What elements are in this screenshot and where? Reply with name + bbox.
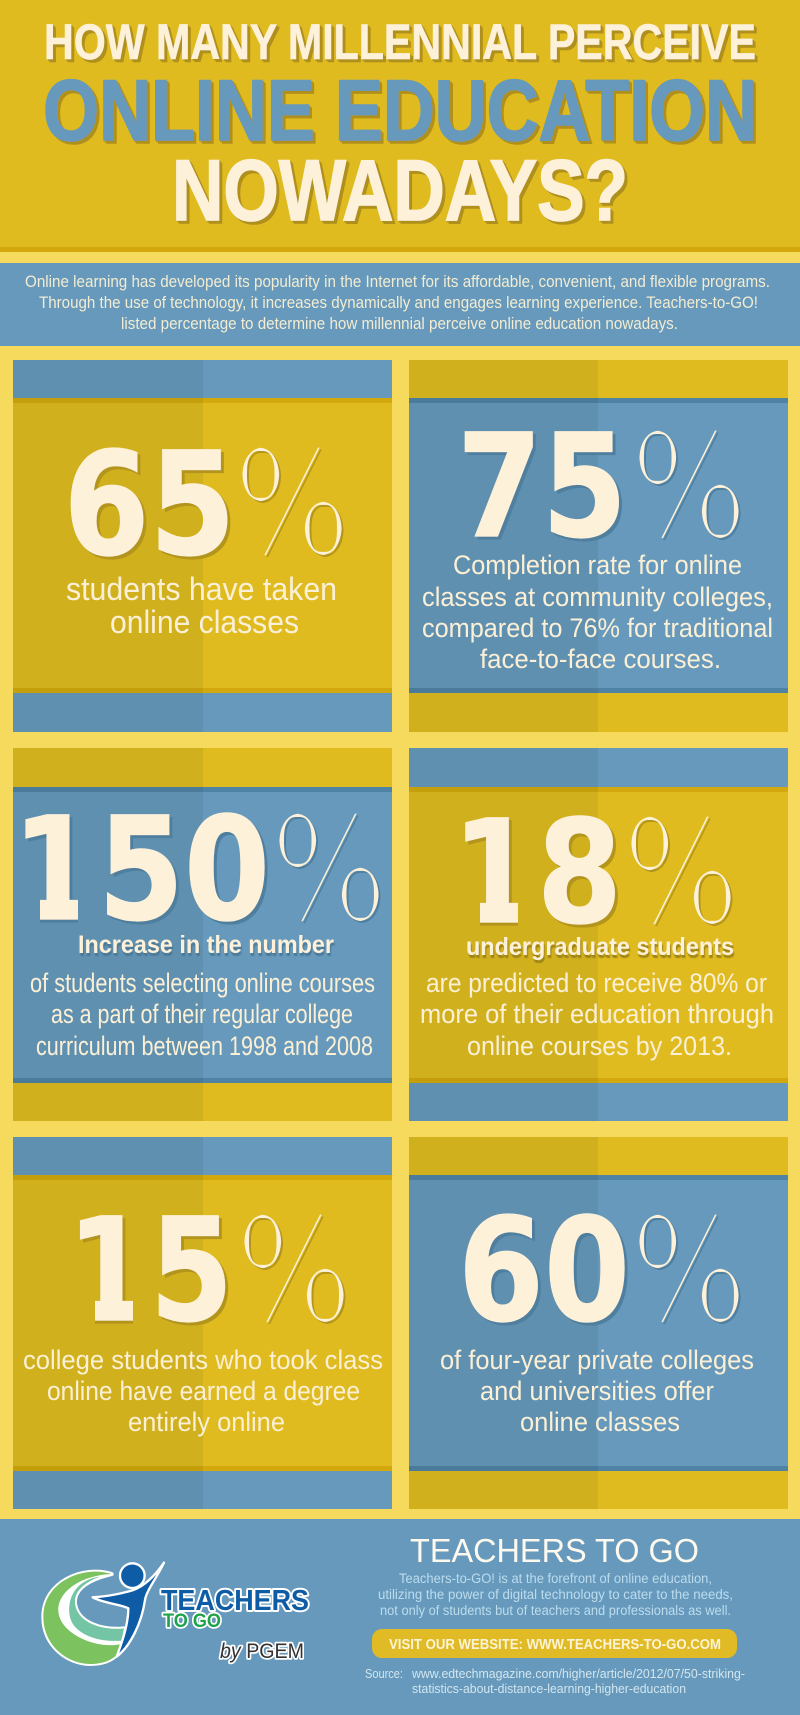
caption: [66, 571, 337, 640]
stat: 65%: [64, 418, 351, 592]
caption: Completion rate for online: [453, 550, 742, 580]
source: Source:: [365, 1667, 403, 1681]
panel: 65 percent: [13, 360, 392, 732]
caption: students have taken: [66, 571, 337, 607]
logo: [43, 1563, 309, 1664]
caption: [440, 1345, 754, 1437]
panel: 60 percent: [409, 1137, 788, 1509]
panel: 18 percent: [409, 748, 788, 1121]
stat: 150%: %: [270, 784, 388, 958]
stat: 18%: [465, 815, 732, 928]
source: www.edtechmagazine.com/higher/article/2012/07/50-striking-: [411, 1667, 745, 1681]
title: [43, 14, 757, 239]
footer description: not only of students but of teachers and professionals as well.: [380, 1603, 731, 1618]
stat: 18%: %: [622, 787, 740, 961]
website button: VISIT OUR WEBSITE: WWW.TEACHERS-TO-GO.COM: [389, 1637, 721, 1653]
logo icon: swoosh and figure: [43, 1563, 164, 1664]
stat: 60%: [458, 1185, 748, 1359]
caption: online courses by 2013.: [467, 1031, 732, 1061]
footer description: Teachers-to-GO! is at the forefront of online education,: [399, 1571, 712, 1586]
caption: online classes: [520, 1407, 680, 1437]
caption: online have earned a degree: [47, 1376, 360, 1406]
caption: online classes: [110, 604, 299, 640]
caption: compared to 76% for traditional: [422, 613, 773, 643]
caption: [23, 1345, 383, 1437]
footer description: [378, 1571, 733, 1618]
footer heading: TEACHERS TO GO: [410, 1532, 699, 1569]
header banner: [0, 0, 800, 252]
panel: 15 percent: [13, 1137, 392, 1509]
caption: curriculum between 1998 and 2008: [36, 1031, 373, 1061]
caption: of students selecting online courses: [30, 968, 375, 998]
intro band: listed percentage to determine how millennial perceive online education nowadays.: [121, 315, 678, 333]
logo wordmark: by PGEM: by PGEM: [220, 1640, 304, 1663]
caption: of four-year private colleges: [440, 1345, 754, 1375]
stat: 60%: %: [630, 1185, 748, 1359]
website button: [372, 1629, 737, 1658]
caption: classes at community colleges,: [422, 582, 773, 612]
stat: 75%: [457, 401, 748, 575]
stat: 15%: 15: [67, 1187, 233, 1354]
stat: 65%: 65: [64, 421, 236, 588]
caption: college students who took class: [23, 1345, 383, 1375]
stat: 15%: [80, 1214, 346, 1326]
panel: 75 percent: [409, 360, 788, 732]
caption: [422, 550, 773, 674]
caption: face-to-face courses.: [480, 644, 721, 674]
footer description: utilizing the power of digital technology to cater to the needs,: [378, 1587, 733, 1602]
panel: 150 percent: [12, 748, 392, 1121]
stat: 75%: %: [630, 401, 748, 575]
bold caption heading: Increase in the number: [78, 931, 334, 959]
caption: and universities offer: [480, 1376, 714, 1406]
stat: 60%: 60: [458, 1187, 630, 1354]
intro band: Through the use of technology, it increases dynamically and engages learning experience. Teachers-to-GO!: [39, 294, 758, 312]
title: NOWADAYS?: [172, 143, 628, 239]
caption: as a part of their regular college: [51, 999, 353, 1029]
stat: 150%: [25, 812, 380, 924]
intro band: [0, 263, 800, 346]
caption: more of their education through: [420, 999, 774, 1029]
stat: 15%: %: [235, 1185, 353, 1359]
logo wordmark: teachers: TEACHERS: [161, 1585, 309, 1617]
stat: 150%: 150: [12, 786, 270, 953]
caption: [30, 968, 375, 1061]
source: [365, 1667, 745, 1696]
logo wordmark: to go: TO GO: [163, 1611, 221, 1632]
stat: 18%: 18: [452, 789, 622, 956]
bold caption heading: undergraduate students: [466, 933, 734, 961]
caption: [420, 968, 774, 1061]
stat: 65%: %: [233, 418, 351, 592]
caption: entirely online: [128, 1407, 285, 1437]
footer: [0, 1519, 800, 1715]
source: statistics-about-distance-learning-higher-education: [412, 1682, 686, 1696]
caption: are predicted to receive 80% or: [426, 968, 767, 998]
stat: 75%: 75: [457, 403, 627, 570]
